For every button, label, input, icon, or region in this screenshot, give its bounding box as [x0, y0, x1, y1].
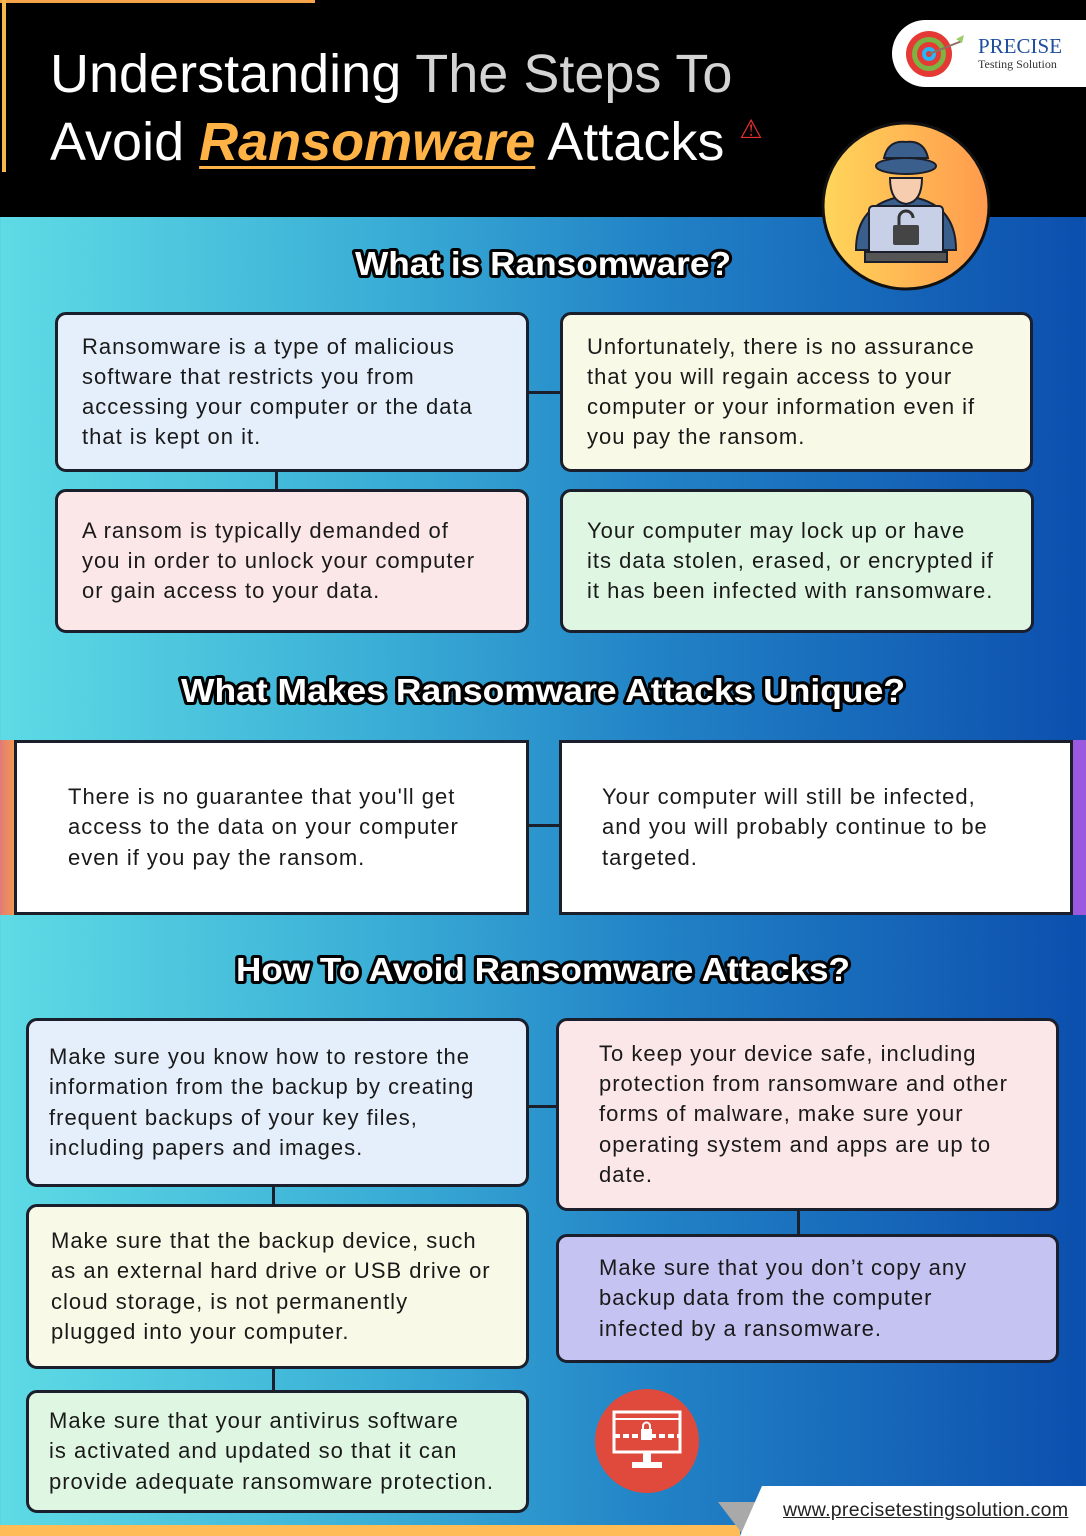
box: backups [26, 1018, 529, 1187]
footer: grey triangle [718, 1502, 755, 1533]
box: lock up: it has been infected with ransomware. [587, 578, 993, 603]
box: no assurance [560, 312, 1033, 472]
box: no assurance: computer or your information even if [587, 394, 975, 419]
box: lock up: its data stolen, erased, or encrypted if [587, 548, 994, 573]
box: lock up [560, 489, 1034, 633]
box: update OS [556, 1018, 1059, 1211]
box: backups: Make sure you know how to restore the [49, 1044, 470, 1069]
box: no assurance: Unfortunately, there is no assurance [587, 334, 975, 359]
box: ransom demanded: A ransom is typically demanded of [82, 518, 449, 543]
box: still infected: Your computer will still be infected, [602, 784, 976, 809]
box: still infected [559, 740, 1073, 915]
box: update OS: protection from ransomware and other [599, 1071, 1008, 1096]
accent: top orange line [0, 0, 315, 3]
box: update OS: forms of malware, make sure your [599, 1101, 964, 1126]
heading: What Makes Ransomware Attacks Unique?: What Makes Ransomware Attacks Unique? [181, 672, 905, 709]
box: backup device: cloud storage, is not permanently [51, 1288, 408, 1314]
box: backups: information from the backup by creating [49, 1074, 474, 1099]
header: black band [0, 0, 1086, 217]
box: antivirus: is activated and updated so that it can [49, 1438, 457, 1463]
icon: hacker circle [822, 122, 990, 290]
box: ransom demanded: or gain access to your data. [82, 578, 380, 603]
box: definition: Ransomware is a type of malicious [82, 334, 455, 359]
box: ransom demanded [55, 489, 529, 633]
title: Avoid Ransomware Attacks ⚠ [50, 112, 763, 172]
box: no guarantee: There is no guarantee that you'll get [68, 784, 455, 809]
box: backup device [26, 1204, 529, 1369]
box: update OS: operating system and apps are up to [599, 1132, 991, 1157]
title [50, 44, 763, 172]
footer: orange bar [0, 1525, 740, 1536]
connectors section 1 [528, 391, 560, 394]
box: ransom demanded: you in order to unlock your computer [82, 548, 475, 573]
box: definition: accessing your computer or the data [82, 394, 473, 419]
title: Understanding The Steps To [50, 44, 732, 104]
box: don't copy [556, 1234, 1059, 1363]
box: lock up: Your computer may lock up or have [587, 518, 965, 543]
box: don't copy: infected by a ransomware. [599, 1316, 882, 1341]
connectors section 3 [528, 1105, 556, 1108]
logo text: PRECISE [978, 34, 1062, 58]
box: no guarantee: even if you pay the ransom. [68, 845, 365, 870]
logo: Testing Solution [978, 57, 1057, 71]
accent: left yellow line [2, 0, 6, 172]
box: no assurance: you pay the ransom. [587, 424, 805, 449]
box: don't copy: Make sure that you don’t copy any [599, 1255, 967, 1280]
footer: website: www.precisetestingsolution.com [783, 1499, 1068, 1521]
box: still infected: and you will probably continue to be [602, 814, 988, 839]
box: no guarantee [14, 740, 529, 915]
box: still infected: targeted. [602, 845, 698, 870]
box: backups: including papers and images. [49, 1135, 363, 1160]
footer: website [740, 1486, 1086, 1536]
box: antivirus: Make sure that your antivirus software [49, 1408, 459, 1433]
heading: What is Ransomware?: What is Ransomware? [355, 245, 731, 282]
accent bars section 2 [0, 740, 15, 915]
box: antivirus: provide adequate ransomware protection. [49, 1469, 494, 1494]
box: backups: frequent backups of your key files, [49, 1104, 418, 1130]
box: update OS: To keep your device safe, including [599, 1041, 976, 1066]
box: definition [55, 312, 529, 472]
box: backup device: as an external hard drive or USB drive or [51, 1258, 491, 1283]
box: update OS: date. [599, 1162, 653, 1187]
box: don't copy: backup data from the computer [599, 1285, 932, 1310]
box: definition: software that restricts you from [82, 364, 415, 389]
box: backup device: plugged into your computer. [51, 1319, 350, 1344]
icon: locked monitor [595, 1389, 699, 1493]
box: no guarantee: access to the data on your computer [68, 814, 459, 839]
box: backup device: Make sure that the backup device, such [51, 1228, 477, 1253]
box: no assurance: that you will regain access to your [587, 364, 952, 389]
icon: target [906, 31, 964, 77]
heading: How To Avoid Ransomware Attacks?: How To Avoid Ransomware Attacks? [236, 951, 850, 988]
logo [892, 20, 1086, 87]
box: definition: that is kept on it. [82, 424, 261, 449]
box: antivirus [26, 1390, 529, 1513]
